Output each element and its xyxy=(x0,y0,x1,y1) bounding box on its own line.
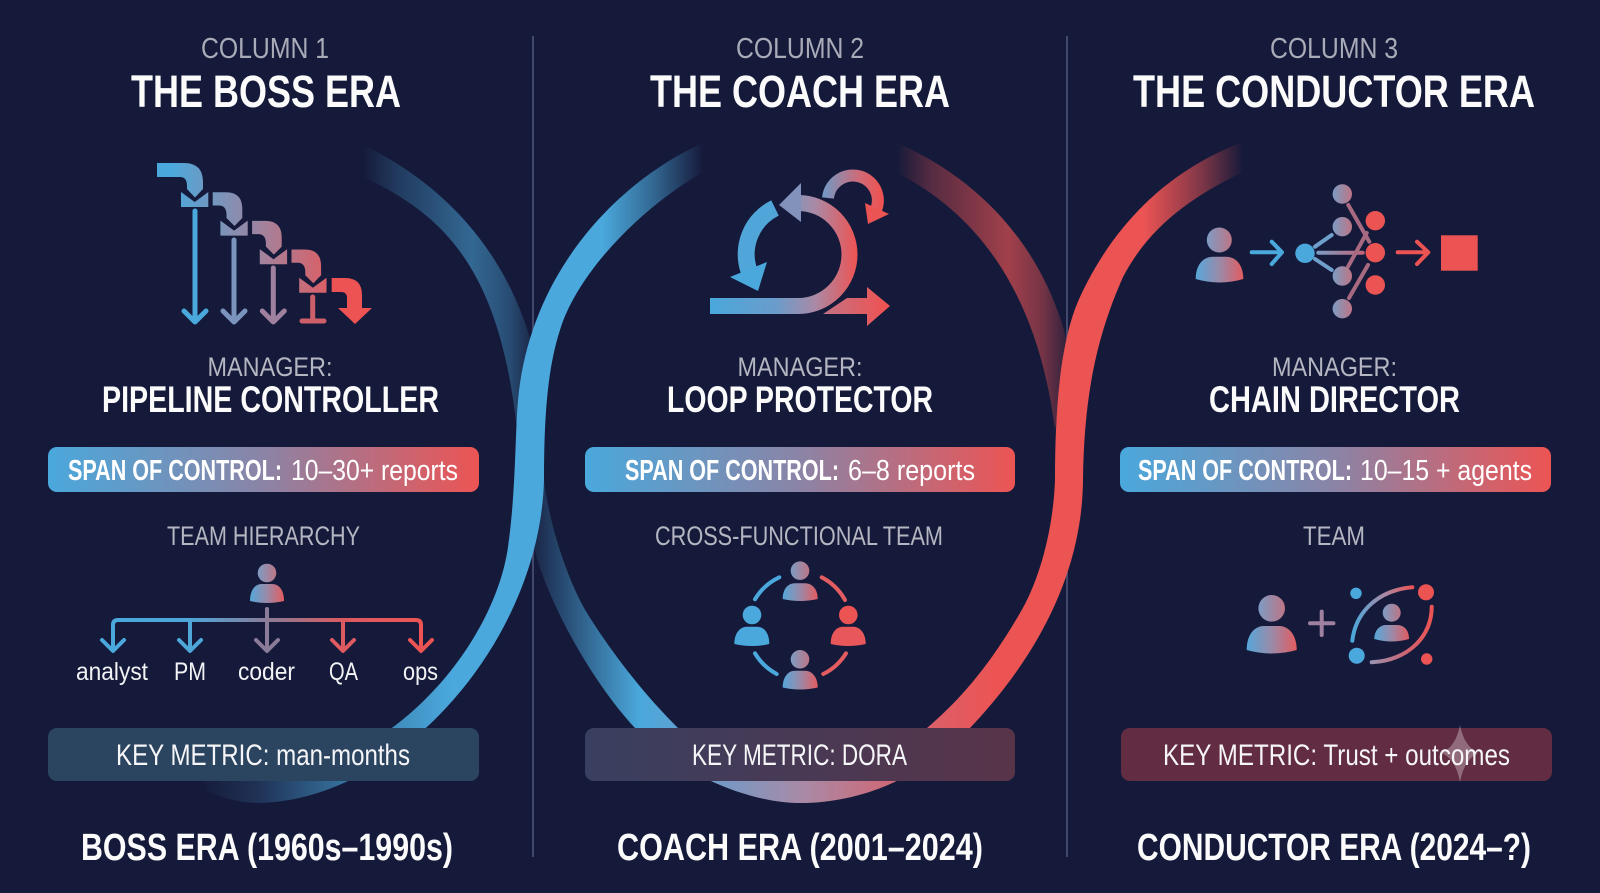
manager label: MANAGER: xyxy=(738,352,862,382)
era footer: BOSS ERA (1960s–1990s) xyxy=(81,827,453,869)
key metric bar: KEY METRIC: DORA xyxy=(692,739,907,772)
org chart: analyst xyxy=(76,658,148,686)
ribbon: blue to red U curve xyxy=(530,142,1243,803)
flowing ribbons xyxy=(200,142,1243,803)
manager label: MANAGER: xyxy=(1272,352,1397,382)
org chart: PM xyxy=(174,658,206,686)
key metric bar xyxy=(48,728,479,781)
span of control pill xyxy=(48,447,479,492)
panel: boss era column xyxy=(48,33,479,869)
ribbon: faded blue arc xyxy=(363,145,532,430)
manager label: MANAGER: xyxy=(208,352,332,382)
key metric bar xyxy=(1121,725,1552,782)
column dividers xyxy=(533,36,1067,857)
panel: conductor era column xyxy=(1120,33,1552,869)
span of control pill xyxy=(1120,447,1551,492)
panel: coach era column xyxy=(585,33,1015,869)
team label: TEAM xyxy=(1303,521,1365,551)
key metric bar: KEY METRIC: Trust + outcomes xyxy=(1163,739,1510,772)
span of control pill: 10–15 + agents xyxy=(1360,455,1532,487)
org chart: coder xyxy=(238,658,295,686)
manager role: LOOP PROTECTOR xyxy=(667,379,933,420)
icon: sparkle xyxy=(1442,725,1478,782)
span of control pill xyxy=(585,447,1015,492)
span of control pill: SPAN OF CONTROL: xyxy=(68,455,282,487)
column label: COLUMN 1 xyxy=(201,33,329,65)
team label: TEAM HIERARCHY xyxy=(167,521,360,551)
span of control pill: SPAN OF CONTROL: xyxy=(1138,455,1352,487)
icon: human to agent network xyxy=(1196,184,1478,318)
ribbon: faded red arc xyxy=(897,143,1068,430)
manager role: CHAIN DIRECTOR xyxy=(1209,379,1460,420)
icon: person plus orchestrated agent xyxy=(1247,584,1434,665)
team circle xyxy=(734,561,866,690)
manager role: PIPELINE CONTROLLER xyxy=(102,379,439,420)
key metric bar xyxy=(585,728,1015,781)
icon: waterfall cascade xyxy=(157,163,372,324)
column label: COLUMN 2 xyxy=(736,33,864,65)
span of control pill: SPAN OF CONTROL: xyxy=(625,455,839,487)
heading: THE BOSS ERA xyxy=(131,66,401,117)
org chart: QA xyxy=(329,658,358,686)
ribbon: blue S curve xyxy=(200,143,703,803)
team label: CROSS-FUNCTIONAL TEAM xyxy=(655,521,943,551)
span of control pill: 10–30+ reports xyxy=(291,455,458,487)
icon: scrum loop xyxy=(710,176,890,326)
org chart xyxy=(76,564,438,686)
heading: THE COACH ERA xyxy=(650,66,950,117)
span of control pill: 6–8 reports xyxy=(848,455,975,487)
key metric bar: KEY METRIC: man-months xyxy=(116,739,410,772)
column label: COLUMN 3 xyxy=(1270,33,1398,65)
era footer: COACH ERA (2001–2024) xyxy=(617,827,983,869)
org chart: ops xyxy=(403,658,438,686)
